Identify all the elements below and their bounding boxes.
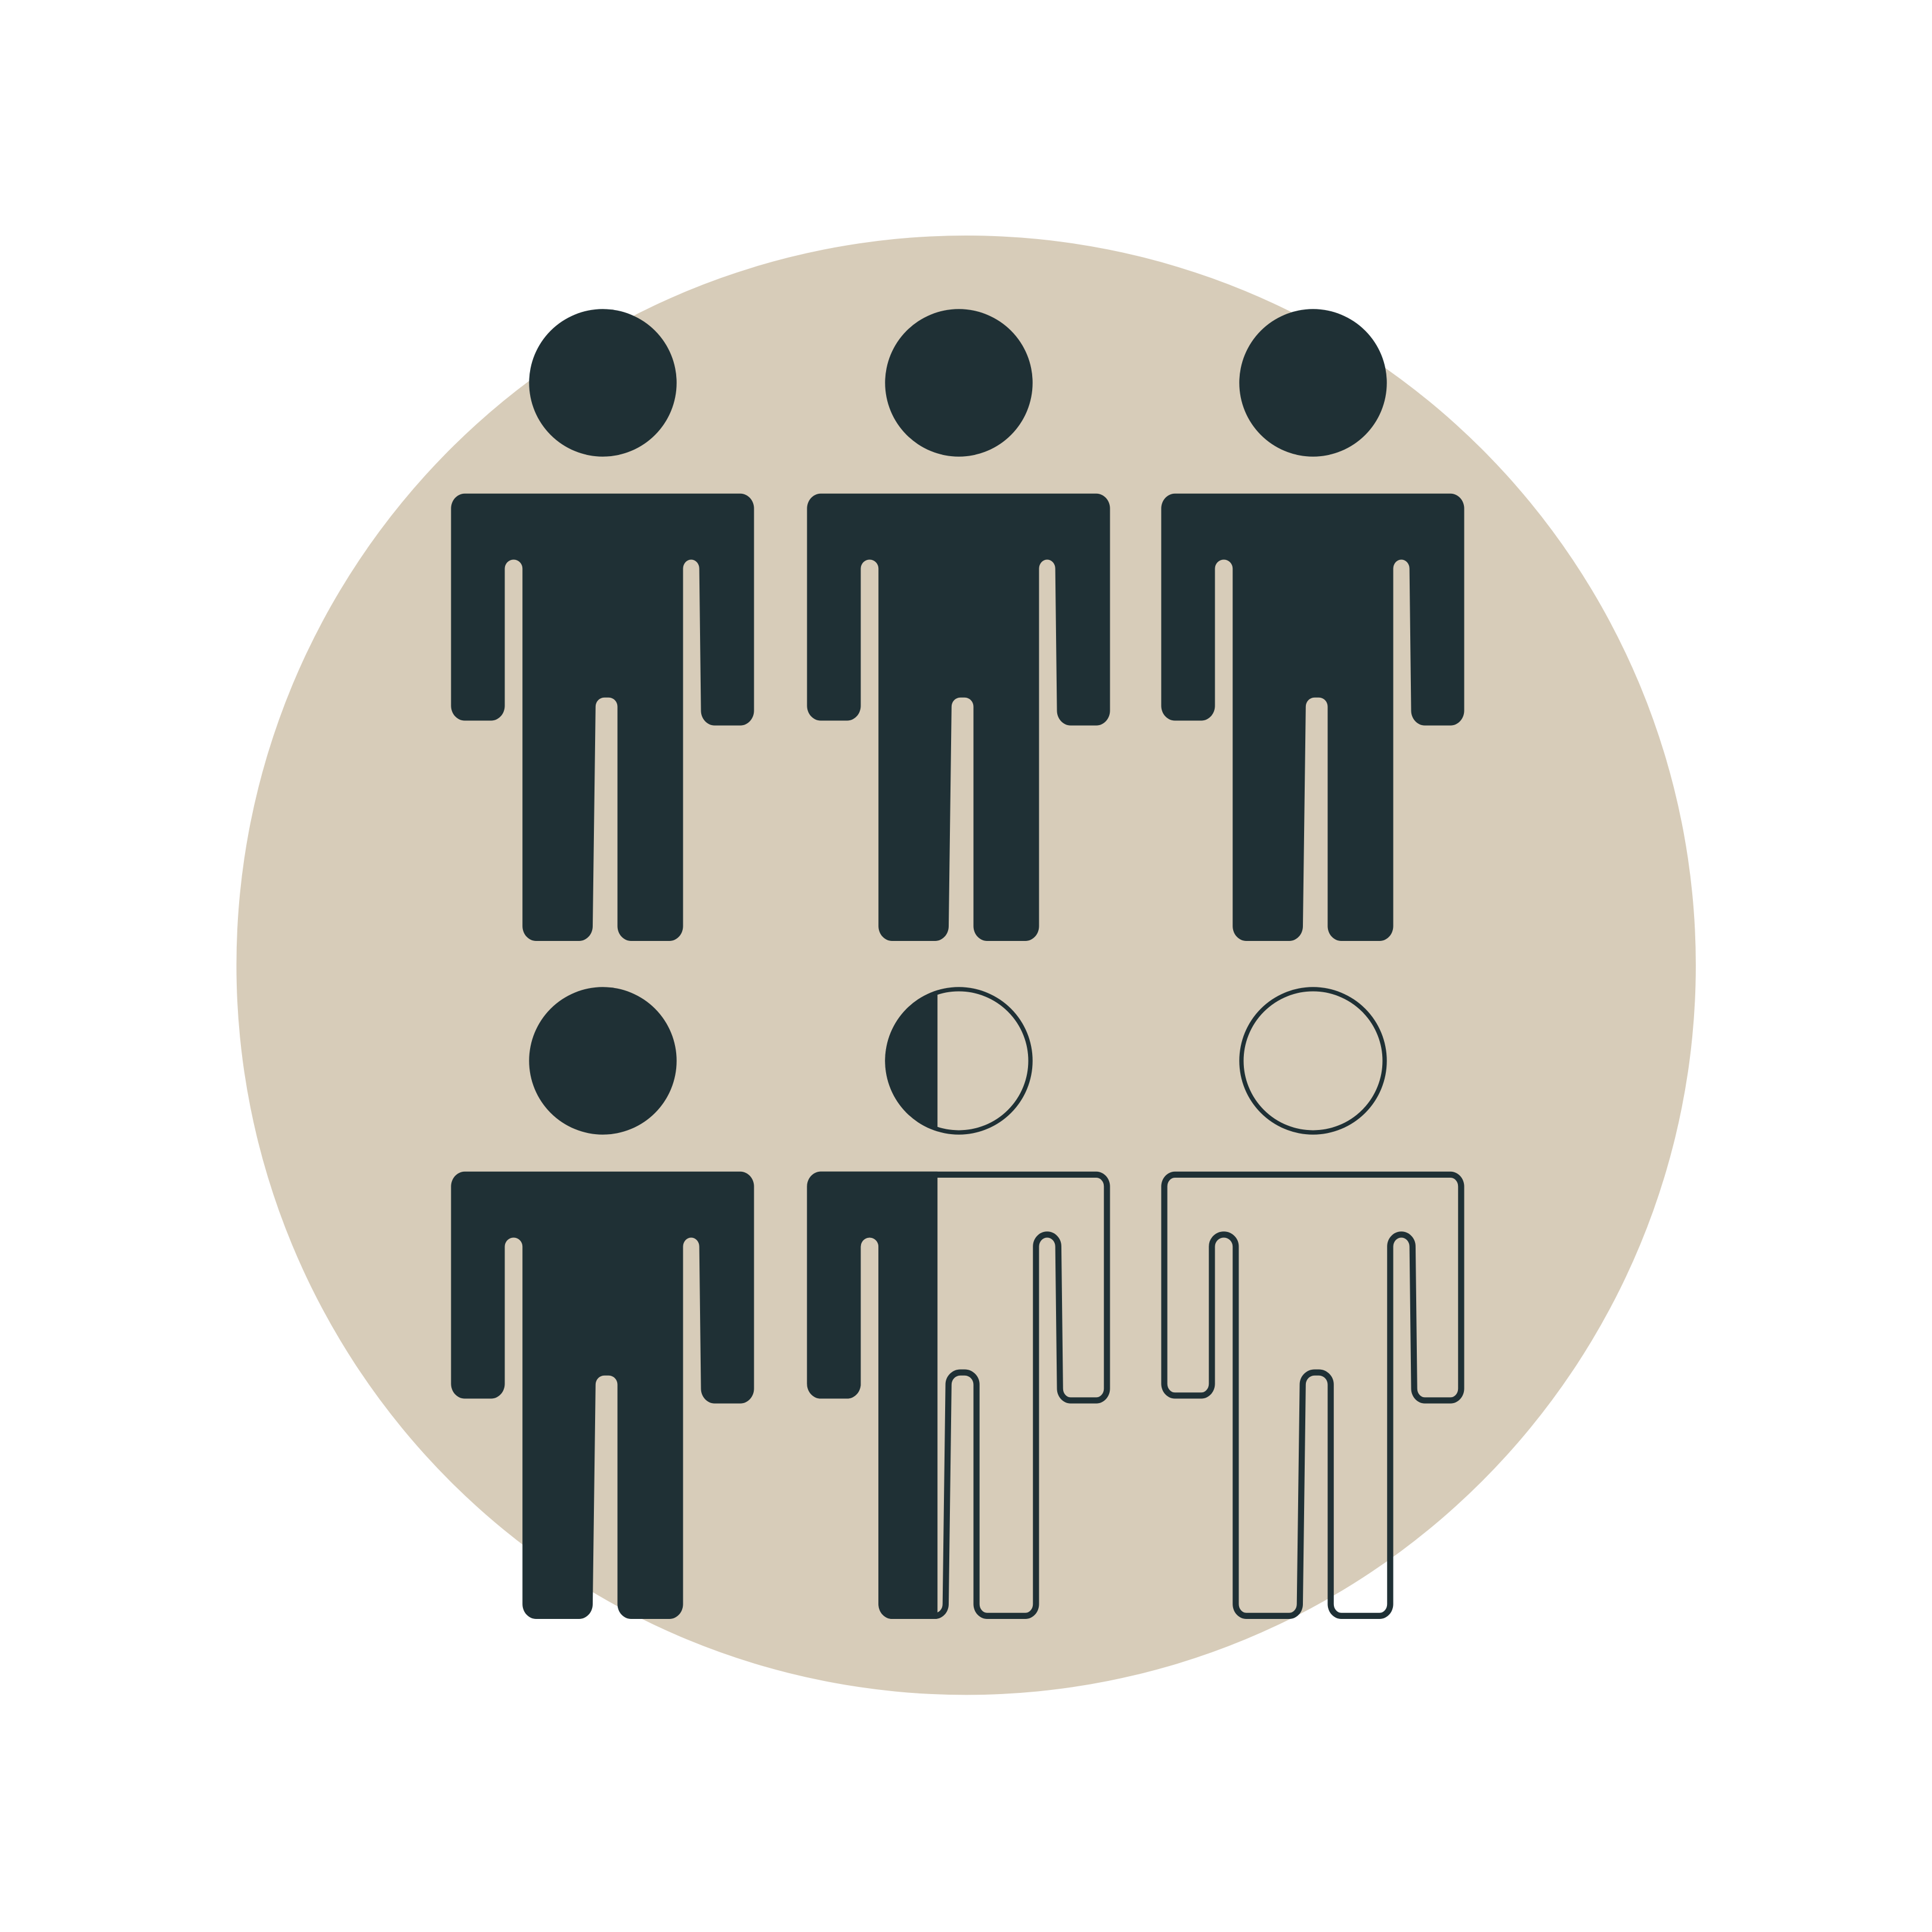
head outline — [885, 987, 1033, 1135]
background circle — [236, 236, 1696, 1695]
figure: row 2 column 2 partly filled — [807, 987, 1110, 1619]
figure: row 1 column 3 filled — [1161, 309, 1465, 941]
body outline — [807, 1172, 1110, 1619]
body — [1161, 494, 1465, 941]
figure: row 1 column 2 filled — [807, 309, 1110, 941]
head filled part — [885, 990, 937, 1132]
body — [451, 494, 754, 941]
head — [529, 987, 677, 1135]
head — [885, 309, 1033, 457]
figure: row 2 column 3 outline only — [1161, 987, 1465, 1619]
body filled part — [807, 1171, 937, 1619]
body — [807, 494, 1110, 941]
head outline — [1239, 987, 1387, 1135]
figure: row 2 column 1 filled — [451, 987, 754, 1619]
head — [529, 309, 677, 457]
body — [451, 1172, 754, 1619]
head — [1239, 309, 1387, 457]
body outline — [1161, 1172, 1465, 1619]
figure: row 1 column 1 filled — [451, 309, 754, 941]
